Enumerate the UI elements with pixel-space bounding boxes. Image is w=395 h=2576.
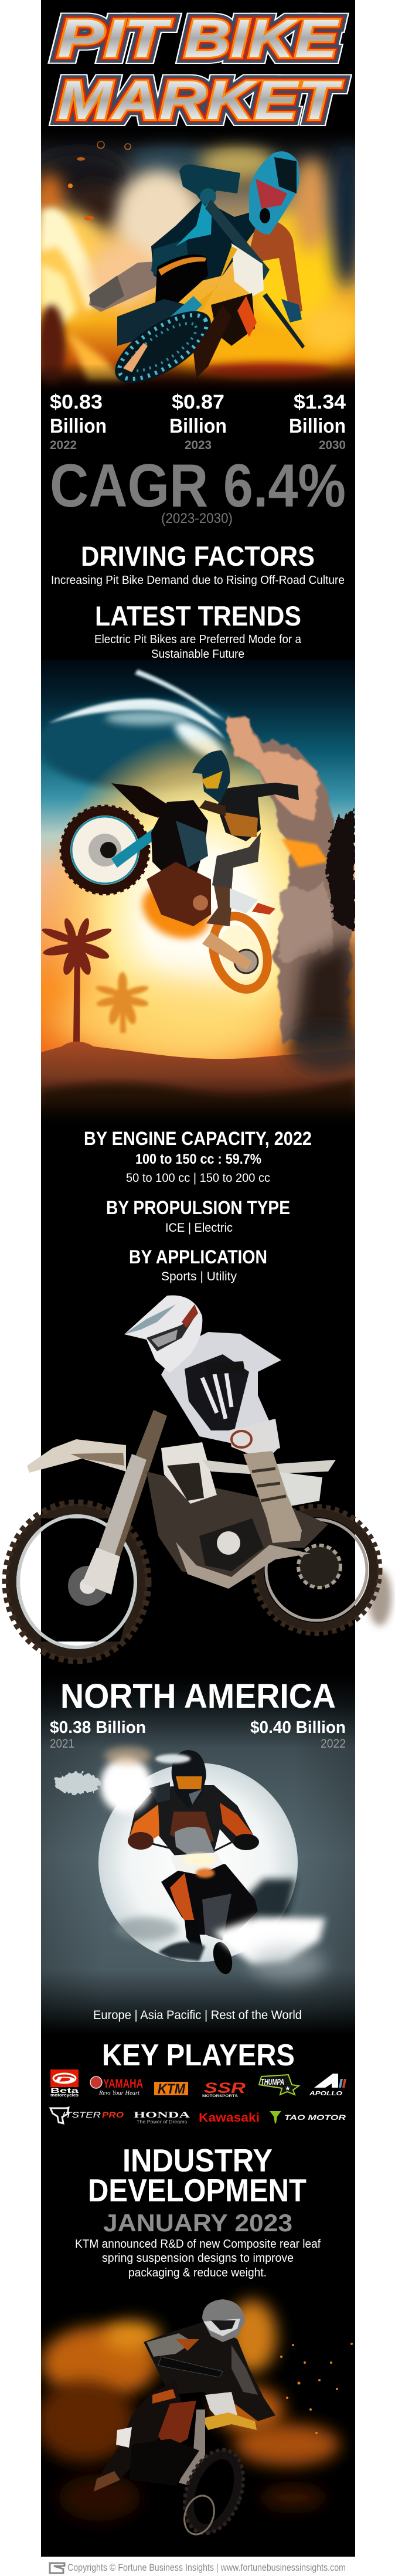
frame and engine bbox=[147, 1442, 336, 1589]
black central panel bbox=[41, 0, 355, 2557]
other regions: Europe | Asia Pacific | Rest of the World bbox=[93, 2009, 302, 2022]
heading: by propulsion type: BY PROPULSION TYPE bbox=[106, 1197, 290, 1218]
rear wheel bbox=[253, 1507, 380, 1633]
palm tree left bbox=[40, 917, 113, 1042]
engine and exhaust bbox=[147, 862, 211, 926]
segment: by propulsion type bbox=[106, 1197, 290, 1235]
industry development section bbox=[75, 2142, 321, 2279]
north america value 2021 bbox=[50, 1718, 146, 1751]
white disc bbox=[98, 1763, 298, 1962]
rider helmet bbox=[192, 750, 230, 803]
title line: PIT BIKE bbox=[57, 9, 339, 69]
application options: Sports | Utility bbox=[161, 1270, 237, 1283]
heading: by engine capacity: BY ENGINE CAPACITY, 2022 bbox=[84, 1128, 312, 1149]
hero fade to black top and bottom bbox=[41, 126, 355, 396]
logo: Beta bbox=[50, 2069, 79, 2098]
logo: Apollo bbox=[309, 2074, 346, 2097]
development description: KTM announced R&D of new Composite rear leaf bbox=[75, 2238, 321, 2251]
dark lower right of disc bbox=[243, 1879, 296, 1938]
north america value 2022 bbox=[250, 1718, 346, 1751]
value 2022: Billion bbox=[50, 415, 107, 437]
exhaust fire bbox=[137, 884, 214, 944]
development description: packaging & reduce weight. bbox=[128, 2266, 267, 2279]
logo: Beta: Beta bbox=[50, 2086, 79, 2095]
logo: Kawasaki: Kawasaki bbox=[199, 2111, 260, 2125]
rider bbox=[217, 783, 299, 841]
central glow bbox=[41, 735, 293, 1059]
value 2022: 2022 bbox=[50, 439, 77, 452]
title line: MARKET: MARKET bbox=[57, 69, 343, 131]
hero fire and smoke background bbox=[41, 134, 355, 389]
logo: Thumpa bbox=[259, 2075, 299, 2095]
industry development heading: INDUSTRY bbox=[122, 2142, 273, 2179]
title line: PIT BIKE: PIT bbox=[57, 9, 172, 69]
industry development heading: DEVELOPMENT bbox=[88, 2172, 307, 2208]
title line: PIT BIKE: PIT bbox=[57, 9, 172, 69]
rider on snow bike bbox=[128, 1750, 259, 1976]
logo: SSR: SSR bbox=[204, 2080, 246, 2096]
development description bbox=[75, 2238, 321, 2279]
CAGR period: (2023-2030) bbox=[161, 511, 233, 526]
smoke column bbox=[226, 715, 355, 1049]
north america value 2021: $0.38 Billion bbox=[50, 1718, 146, 1737]
trend text bbox=[94, 633, 302, 661]
logo: Yamaha: YAMAHA bbox=[103, 2077, 143, 2091]
footer copyright bbox=[50, 2562, 346, 2573]
title line: PIT BIKE: BIKE bbox=[184, 9, 339, 69]
industry development heading bbox=[88, 2142, 307, 2208]
logo: Honda bbox=[134, 2111, 190, 2125]
footer text: Copyrights © Fortune Business Insights | www.fortunebusinessinsights.com bbox=[67, 2562, 346, 2573]
logo: Yamaha: Revs Your Heart bbox=[98, 2090, 139, 2096]
development description: spring suspension designs to improve bbox=[102, 2252, 294, 2265]
CAGR figure: CAGR 6.4% bbox=[50, 452, 346, 520]
trend text: Electric Pit Bikes are Preferred Mode for a bbox=[94, 633, 302, 646]
north america heading: NORTH AMERICA bbox=[60, 1677, 336, 1715]
title line: MARKET: MARKET bbox=[57, 69, 343, 131]
rear wheel bbox=[66, 811, 144, 889]
rider and bike bbox=[89, 151, 305, 397]
illustration: white motocross bike overflowing the panel bbox=[5, 1295, 391, 1661]
value 2030 bbox=[289, 391, 346, 452]
leading segment share: 100 to 150 cc : 59.7% bbox=[135, 1151, 261, 1167]
logo: Honda: HONDA bbox=[134, 2111, 190, 2120]
value 2022 bbox=[50, 391, 107, 452]
logo: Thumpa: ★ bbox=[285, 2085, 291, 2092]
driving factors section bbox=[51, 541, 345, 587]
north america value 2021: 2021 bbox=[50, 1737, 74, 1751]
trend text: Sustainable Future bbox=[151, 648, 244, 661]
rider body bbox=[161, 1332, 302, 1543]
value 2030: $1.34 bbox=[294, 391, 346, 413]
logo: Apollo: APOLLO bbox=[309, 2091, 342, 2097]
logo: Honda: The Power of Dreams bbox=[137, 2119, 187, 2125]
value 2022: $0.83 bbox=[50, 391, 103, 413]
hero illustration: rider in fire bbox=[41, 134, 355, 389]
logo: SSR bbox=[202, 2080, 246, 2098]
segment: by engine capacity bbox=[84, 1128, 312, 1185]
illustration: bike jumping in desert sunset bbox=[38, 660, 369, 1126]
value 2023: Billion bbox=[169, 415, 227, 437]
heading: driving factors: DRIVING FACTORS bbox=[81, 541, 315, 572]
front fender bbox=[27, 1439, 126, 1473]
title: PIT BIKE MARKET bbox=[57, 9, 343, 131]
north america value 2022: 2022 bbox=[321, 1737, 346, 1751]
fender and fork bbox=[111, 783, 170, 818]
key players heading: KEY PLAYERS bbox=[102, 2038, 295, 2072]
value 2023: 2023 bbox=[185, 439, 212, 452]
dust cloud at rear wheel bbox=[368, 1569, 391, 1626]
driving factor text: Increasing Pit Bike Demand due to Rising Off-Road Culture bbox=[51, 574, 345, 587]
logo: Tao Motor: TAO MOTOR bbox=[284, 2113, 346, 2122]
front wheel bbox=[5, 1503, 148, 1661]
palm tree right bbox=[95, 972, 149, 1033]
logo: Pitster Pro: PRO bbox=[102, 2110, 124, 2119]
value 2023: $0.87 bbox=[172, 391, 224, 413]
logo: Yamaha bbox=[90, 2077, 143, 2096]
title line: PIT BIKE: PIT bbox=[57, 9, 172, 69]
logo: KTM: KTM bbox=[158, 2081, 186, 2097]
logo: Pitster Pro: ITSTER bbox=[62, 2110, 101, 2119]
logo: Beta: motorcycles bbox=[50, 2094, 79, 2098]
illustration: rider in orange dust bbox=[35, 2299, 353, 2541]
title line: PIT BIKE: PIT bbox=[57, 9, 172, 69]
other segments: 50 to 100 cc | 150 to 200 cc bbox=[126, 1171, 270, 1185]
title line: PIT BIKE: BIKE bbox=[184, 9, 339, 69]
title line: PIT BIKE: BIKE bbox=[184, 9, 339, 69]
slate background bbox=[41, 1677, 355, 2034]
value 2030: 2030 bbox=[319, 439, 346, 452]
second wheel bbox=[209, 912, 272, 994]
title line: MARKET: MARKET bbox=[57, 69, 343, 131]
heading: by application: BY APPLICATION bbox=[129, 1246, 267, 1267]
logo: Tao Motor bbox=[270, 2111, 346, 2123]
heading: latest trends: LATEST TRENDS bbox=[95, 600, 301, 631]
logo: Beta: D bbox=[54, 2075, 75, 2084]
orange dust clouds bbox=[35, 2300, 340, 2521]
propulsion options: ICE | Electric bbox=[165, 1221, 233, 1235]
value 2030: Billion bbox=[289, 415, 346, 437]
market values by year bbox=[50, 391, 346, 452]
sky gradient bbox=[41, 660, 355, 1059]
title line: MARKET: MARKET bbox=[57, 69, 343, 131]
title line: PIT BIKE: PIT bbox=[57, 9, 172, 69]
fork bbox=[88, 1410, 167, 1583]
rider helmet bbox=[124, 1295, 202, 1373]
north america value 2022: $0.40 Billion bbox=[250, 1718, 346, 1737]
company logos bbox=[50, 2069, 346, 2125]
title line: PIT BIKE: BIKE bbox=[184, 9, 339, 69]
logo: Thumpa: THUMPA bbox=[261, 2077, 284, 2087]
rider helmet bbox=[202, 2299, 245, 2342]
planet bbox=[38, 670, 255, 790]
ground dunes bbox=[41, 1026, 369, 1126]
value 2023 bbox=[169, 391, 227, 452]
rider and bike bbox=[94, 2322, 275, 2541]
title line: MARKET: MARKET bbox=[57, 69, 343, 131]
regional section: north america bbox=[41, 1677, 355, 2034]
orange sparks bbox=[280, 2343, 353, 2434]
logo: Pitster Pro bbox=[50, 2108, 124, 2123]
latest trends section bbox=[94, 600, 302, 661]
footer logo bbox=[50, 2563, 64, 2573]
title line: PIT BIKE: BIKE bbox=[184, 9, 339, 69]
development date: JANUARY 2023 bbox=[103, 2209, 292, 2237]
logo: SSR: MOTORSPORTS bbox=[202, 2095, 238, 2098]
jumping bike and rider bbox=[62, 750, 299, 996]
segment: by application bbox=[129, 1246, 267, 1283]
snow clouds bbox=[54, 1746, 325, 1982]
palm trees bbox=[40, 917, 149, 1042]
